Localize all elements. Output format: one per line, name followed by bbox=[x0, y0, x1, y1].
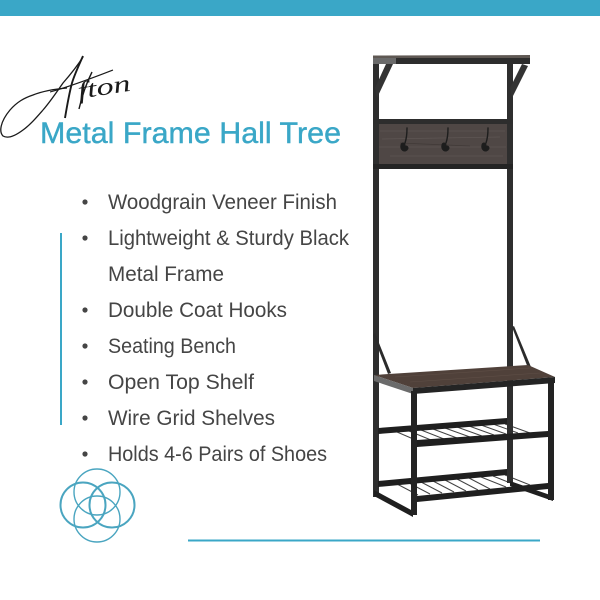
icon: coat hooks bbox=[403, 128, 488, 149]
horizontal accent line bbox=[188, 540, 540, 542]
title: Metal Frame Hall Tree bbox=[40, 117, 341, 150]
back posts bbox=[373, 60, 513, 497]
feature: woodgrain: Woodgrain Veneer Finish bbox=[108, 191, 337, 214]
top banner bbox=[0, 0, 600, 16]
top shelf bbox=[373, 55, 530, 64]
bench seat bbox=[374, 365, 555, 394]
feature: hooks: Double Coat Hooks bbox=[108, 299, 287, 322]
feature: shoes: Holds 4-6 Pairs of Shoes bbox=[108, 443, 327, 466]
brand signature: Afton bbox=[1, 56, 132, 137]
feature: metal frame: Metal Frame bbox=[108, 263, 224, 286]
vertical accent line bbox=[60, 233, 62, 425]
coat hook panel bbox=[373, 119, 513, 169]
feature: metal frame bbox=[82, 227, 349, 286]
icon: interlocking circles logo bbox=[60, 469, 134, 542]
bench braces bbox=[373, 326, 531, 374]
feature list bbox=[82, 191, 349, 466]
product illustration: hall tree bbox=[373, 55, 555, 517]
feature: metal frame: Lightweight & Sturdy Black bbox=[108, 227, 349, 250]
top shelf braces bbox=[375, 64, 528, 98]
feature: wire shelves: Wire Grid Shelves bbox=[108, 407, 275, 430]
shoe shelf rails bbox=[374, 418, 553, 517]
wire shelf wires bbox=[397, 424, 530, 495]
feature: bench: Seating Bench bbox=[108, 335, 236, 358]
feature: top shelf: Open Top Shelf bbox=[108, 371, 254, 394]
front legs bbox=[411, 380, 554, 515]
